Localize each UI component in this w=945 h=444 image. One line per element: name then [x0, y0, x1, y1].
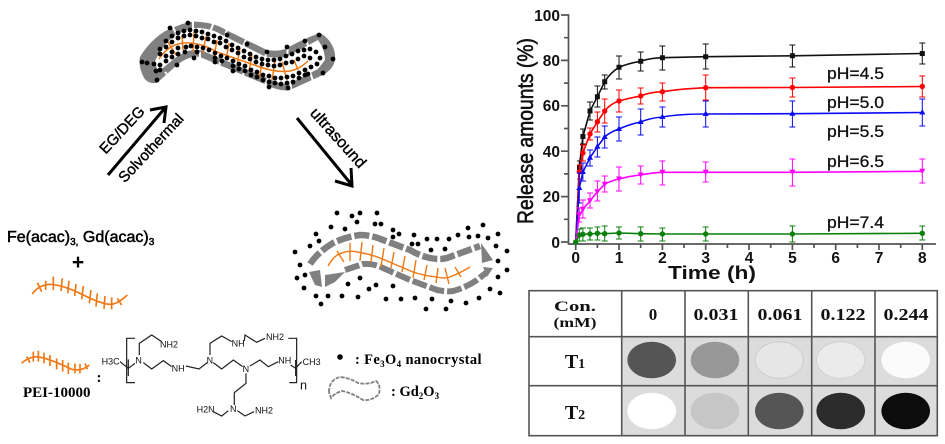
T2 row phantoms — [627, 393, 930, 429]
legend: Gd2O3: O — [423, 384, 435, 400]
label: EG/DEG: EG/DEG — [96, 103, 148, 157]
chemical structure: PEI: H3C — [102, 356, 120, 366]
table header text: T2 — [565, 402, 585, 424]
legend: Fe3O4 nanocrystal: nanocrystal — [402, 352, 482, 368]
chemical structure: PEI: NH2 — [266, 332, 284, 342]
diagram: disassembled nanoparticle after ultrasound — [295, 213, 507, 309]
legend icon: PEI strand — [22, 351, 89, 374]
colon: : — [96, 370, 102, 386]
chemical structure: PEI: N — [243, 364, 249, 374]
series labels: pH=6.5 — [827, 152, 884, 171]
x axis tick labels: 0 — [571, 250, 580, 267]
chart axes and ticks — [561, 15, 936, 250]
table grid lines — [529, 291, 937, 436]
plus sign: + — [72, 251, 84, 274]
chemical structure: PEI: N — [207, 355, 213, 365]
chemical structure: PEI: NH — [172, 363, 185, 373]
y axis tick labels: 20 — [543, 189, 560, 206]
x axis tick labels: 6 — [831, 250, 840, 267]
chemical structure: PEI: CH3 — [303, 357, 321, 367]
table gray cell background — [622, 337, 937, 436]
legend: Gd2O3: 3 — [435, 391, 440, 401]
legend: Gd2O3: : Gd — [391, 384, 419, 400]
x axis tick labels: 5 — [788, 250, 797, 267]
series: pH 4.5 — [576, 43, 925, 242]
chemical structure: PEI: N — [135, 355, 142, 365]
precursor text: Fe(acac)3, Gd(acac)3: 3, — [70, 237, 78, 248]
y axis tick labels: 100 — [534, 8, 560, 25]
table header text — [554, 299, 929, 424]
label: Solvothermal: Solvothermal — [115, 111, 187, 186]
icon: PEI polymer strand — [32, 277, 127, 309]
series labels: pH=4.5 — [827, 64, 884, 83]
table header text: 0.122 — [820, 305, 866, 324]
arrow: solvothermal synthesis — [108, 107, 166, 175]
x axis title: Time (h) — [668, 263, 756, 283]
x axis tick labels: 8 — [918, 250, 927, 267]
table header text: 0.244 — [884, 305, 929, 324]
series: pH 5.0 — [576, 75, 925, 242]
y axis tick labels: 60 — [543, 98, 560, 115]
legend: Fe3O4 nanocrystal: 4 — [397, 359, 402, 369]
x axis tick labels — [571, 250, 927, 267]
precursor text: Fe(acac)3, Gd(acac)3: Fe(acac) — [7, 229, 70, 246]
series labels: pH=5.0 — [827, 93, 884, 112]
x axis tick labels: 1 — [615, 250, 624, 267]
y axis tick labels: 40 — [543, 144, 560, 161]
table: MR relaxivity phantom images — [529, 291, 937, 436]
chemical structure: PEI: NH2 — [160, 340, 178, 350]
legend: Gd2O3 — [329, 377, 440, 401]
diagram: loaded worm-like nanoparticle — [140, 18, 335, 93]
chemical structure: PEI: N — [230, 404, 236, 414]
y axis title: Release amounts (%) — [513, 38, 538, 224]
y axis tick labels: 0 — [551, 235, 560, 252]
legend label: PEI-10000: PEI-10000 — [23, 385, 90, 401]
chemical structure: PEI: H2N — [197, 405, 215, 415]
y axis tick labels — [534, 8, 560, 252]
chemical structure: PEI — [102, 332, 321, 416]
label: ultrasound: ultrasound — [306, 105, 369, 172]
chemical structure: PEI: n — [300, 378, 307, 392]
series labels: pH=7.4 — [827, 213, 884, 232]
series: pH 7.4 — [573, 226, 925, 245]
legend: Fe3O4 nanocrystal — [337, 352, 482, 369]
chemical structure: PEI: NH — [278, 355, 291, 365]
x axis tick labels: 4 — [745, 250, 754, 267]
table header text: 0.061 — [758, 305, 802, 324]
series labels: pH=5.5 — [827, 122, 884, 141]
x axis tick labels: 3 — [701, 250, 710, 267]
chart: drug release vs time — [513, 8, 936, 283]
legend: Fe3O4 nanocrystal: 3 — [380, 359, 385, 369]
series: pH 5.5 — [576, 99, 925, 242]
table header text: Con. — [554, 299, 596, 315]
chemical structure: PEI: NH2 — [255, 405, 273, 415]
legend: Gd2O3: 2 — [419, 391, 424, 401]
table header text: T1 — [565, 351, 585, 373]
series labels — [827, 64, 884, 232]
chemical structure: PEI: NH — [232, 339, 245, 349]
series: pH 6.5 — [576, 159, 925, 242]
y axis tick labels: 80 — [543, 53, 560, 70]
precursor text: Fe(acac)3, Gd(acac)3: 3 — [149, 237, 155, 248]
table header text: (mM) — [554, 316, 597, 331]
precursor text: Fe(acac)3, Gd(acac)3: Gd(acac) — [78, 229, 149, 246]
legend: Fe3O4 nanocrystal: : Fe — [355, 352, 380, 368]
x axis tick labels: 2 — [658, 250, 667, 267]
table header text: 0.031 — [694, 305, 738, 324]
legend: Fe3O4 nanocrystal: O — [385, 352, 397, 368]
arrow: ultrasound — [297, 118, 352, 186]
x axis tick labels: 7 — [875, 250, 883, 267]
table header text: 0 — [649, 305, 657, 324]
T1 row phantoms — [627, 342, 930, 378]
